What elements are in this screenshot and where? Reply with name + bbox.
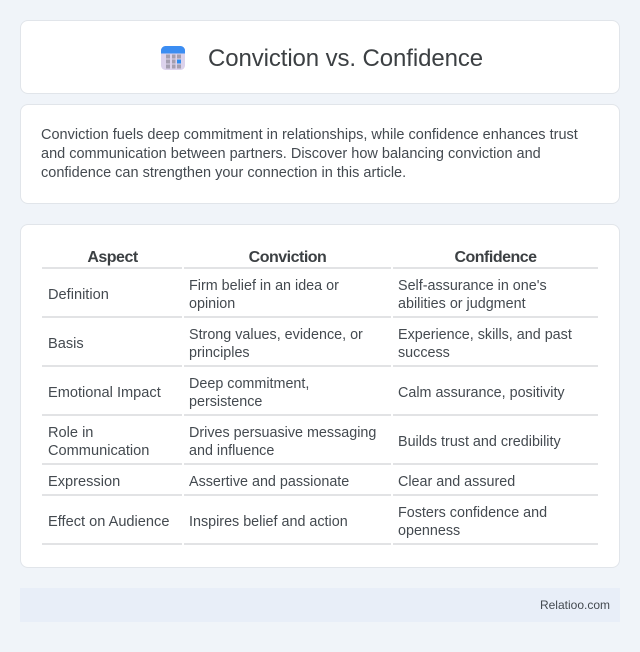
heading: Confidence: Confidence [454,249,537,266]
row: Basis: success [398,345,450,361]
text block: introduction: Conviction fuels deep commitment in relationships, while confidence enhances trust [41,127,578,143]
row: Expression: Clear and assured [398,474,515,490]
row: Role in Communication: and influence [189,443,274,459]
row: Basis: principles [189,345,250,361]
row: Effect on Audience: Fosters confidence and [398,505,547,521]
row: Role in Communication: Communication [48,443,149,459]
row: Basis [48,327,572,361]
panel: title card [20,20,620,94]
row: Expression: Assertive and passionate [189,474,349,490]
row: Basis: Basis [48,336,84,352]
footer [20,588,620,622]
row: Effect on Audience: Effect on Audience [48,514,169,530]
text block: introduction [41,127,578,181]
panel: introduction [20,104,620,204]
row: Definition: abilities or judgment [398,296,526,312]
row: Effect on Audience: openness [398,523,460,539]
comparison table [42,249,598,545]
heading: Conviction: Conviction [249,249,326,266]
row: Effect on Audience: Inspires belief and action [189,514,348,530]
row: Expression: Expression [48,474,120,490]
row: Definition: Firm belief in an idea or [189,278,339,294]
text block: introduction: and communication between partners. Discover how balancing conviction and [41,146,541,162]
row: Basis: Experience, skills, and past [398,327,572,343]
row: Definition [48,278,547,312]
row: Emotional Impact: Calm assurance, positivity [398,385,565,401]
row: Emotional Impact: persistence [189,394,262,410]
row: Emotional Impact [48,376,565,410]
text block: introduction: confidence can strengthen your connection in this article. [41,165,406,181]
row: Emotional Impact: Emotional Impact [48,385,161,401]
row: Role in Communication: Role in [48,425,93,441]
row: Definition: Definition [48,287,109,303]
row: Definition: opinion [189,296,235,312]
panel: comparison table [20,224,620,568]
row: Basis: Strong values, evidence, or [189,327,363,343]
icon: calendar [161,46,185,70]
row: Expression [48,474,515,490]
footer credit: Relatioo.com [540,598,610,612]
row: Emotional Impact: Deep commitment, [189,376,309,392]
row: Effect on Audience [48,505,547,539]
row: Definition: Self-assurance in one's [398,278,547,294]
heading: Aspect: Aspect [87,249,138,266]
row: Role in Communication: Builds trust and credibility [398,434,561,450]
row: Role in Communication [48,425,561,459]
title: Conviction vs. Confidence [208,45,483,72]
row: Role in Communication: Drives persuasive messaging [189,425,376,441]
